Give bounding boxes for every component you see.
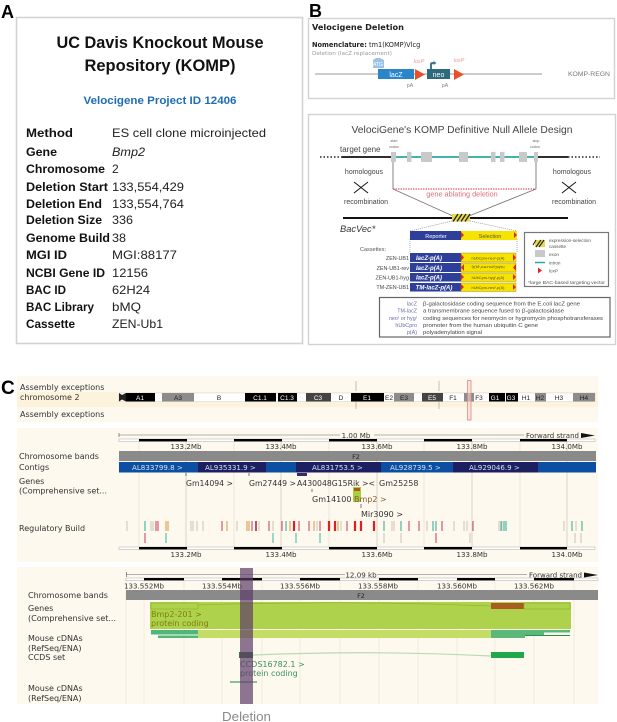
cassette rows: TM-lacZ-p(A)	[416, 286, 452, 292]
Bmp2 gene track: protein coding	[151, 619, 209, 628]
metadata table: 133,554,764	[112, 197, 184, 211]
deletion highlight	[240, 568, 253, 704]
chromosome 2 ideogram: B	[217, 395, 221, 402]
grid lines	[126, 581, 574, 704]
start and stop codon labels: codon	[389, 145, 399, 149]
legend box: loxP	[549, 268, 559, 274]
start and stop codon labels: codon	[530, 145, 540, 149]
genes track: A430048G15Rik ><	[297, 479, 375, 488]
top scale: 1.00 Mb	[342, 431, 371, 440]
left homologous recombination: homologous	[345, 169, 384, 176]
neo box	[427, 69, 450, 79]
chromosome 2 ideogram: H4	[580, 395, 589, 402]
genes track: Gm14094 >	[186, 479, 233, 488]
cassette rows: ZEN-UB1-hyg	[375, 276, 409, 282]
bottom scale	[119, 547, 595, 559]
metadata table: ZEN-Ub1	[112, 317, 163, 331]
nomenclature: Nomenclature: tm1(KOMP)Vlcg	[312, 41, 420, 49]
genes track	[186, 473, 418, 519]
metadata table: Deletion Size	[26, 213, 102, 227]
metadata table: 2	[112, 162, 119, 176]
chromosome band F2: F2	[352, 453, 360, 461]
dotted expansion lines	[410, 221, 517, 253]
detail row labels: (RefSeq/ENA)	[28, 694, 81, 703]
bottom scale: 134.0Mb	[552, 550, 583, 559]
panel A: KOMP repository record	[16, 18, 302, 344]
loxP triangle	[415, 69, 425, 80]
region row labels	[19, 452, 107, 533]
region row labels: Chromosome bands	[19, 452, 99, 461]
detail row labels: Chromosome bands	[28, 591, 108, 600]
metadata table: BAC ID	[26, 283, 66, 297]
icon: ATG: ATG	[373, 62, 383, 68]
icon: ATG	[373, 58, 384, 68]
metadata table: Deletion End	[26, 197, 102, 211]
chromosome 2 ideogram: F3	[475, 395, 483, 402]
metadata table	[26, 126, 266, 331]
top scale: 133.8Mb	[457, 442, 488, 451]
cassette rows: hUbCpro-hygʳ-p(A)	[472, 275, 505, 280]
detail scale: 12.09 kb	[345, 570, 377, 580]
Bmp2 gene track	[150, 602, 571, 629]
panel C: chromosome overview	[17, 376, 598, 422]
chromosome 2 ideogram: E5	[428, 395, 436, 402]
title	[56, 33, 264, 75]
metadata table: 12156	[112, 266, 148, 280]
cassette rows: hUbCpro-neoʳ-p(A)	[472, 285, 505, 290]
detail row labels: CCDS set	[28, 653, 65, 662]
CCDS track: protein coding	[240, 669, 298, 678]
metadata table: 62H24	[112, 283, 150, 297]
metadata table: Method	[26, 126, 73, 140]
metadata table: MGI ID	[26, 248, 67, 262]
cassette rows: ZEN-UB1-rev	[377, 266, 409, 272]
contigs track: AL929046.9 >	[469, 463, 520, 472]
metadata table: bMQ	[112, 300, 141, 314]
legend box	[524, 232, 608, 286]
detail row labels: (RefSeq/ENA)	[28, 644, 81, 653]
left homologous recombination: recombination	[344, 199, 388, 206]
metadata table: Chromosome	[26, 162, 105, 176]
chromosome band F2	[126, 590, 598, 600]
chromosome 2 ideogram: H1	[522, 395, 531, 402]
detail row labels: Mouse cDNAs	[28, 684, 83, 693]
metadata table: 38	[112, 231, 126, 245]
CCDS track	[239, 652, 524, 678]
contigs track: AL928739.5 >	[390, 463, 441, 472]
region row labels: Genes	[19, 477, 44, 486]
panel label C: C	[1, 378, 15, 399]
metadata table: BAC Library	[26, 300, 94, 314]
contigs track: AL831753.5 >	[312, 463, 363, 472]
region row labels: Contigs	[19, 463, 49, 472]
target gene track	[320, 152, 600, 162]
design title: VelociGene's KOMP Definitive Null Allele Design	[352, 124, 573, 136]
detail scale	[124, 570, 598, 590]
detail scale: 133.562Mb	[514, 582, 554, 590]
panel label A: A	[1, 2, 14, 22]
loxP triangle	[454, 69, 464, 80]
right homologous recombination: homologous	[553, 169, 592, 176]
metadata table: MGI:88177	[112, 248, 177, 262]
right homologous recombination	[552, 169, 596, 206]
bottom scale: 133.8Mb	[457, 550, 488, 559]
chromosome 2 ideogram: A3	[174, 395, 182, 402]
loxP labels	[414, 58, 465, 65]
glossary box: polyadenylation signal	[423, 330, 482, 336]
cassette rows: lacZ-p(A)	[416, 276, 442, 282]
metadata table: 336	[112, 213, 133, 227]
detail row labels: Genes	[28, 604, 53, 613]
detail row labels: Mouse cDNAs	[28, 634, 83, 643]
metadata table: Deletion Start	[26, 180, 108, 194]
region row labels: Regulatory Build	[19, 524, 85, 533]
chromosome 2 ideogram	[119, 393, 595, 402]
cassette rows: ZEN-UB1	[386, 256, 409, 262]
detail scale: 133.556Mb	[280, 582, 320, 590]
CCDS track: CCDS16782.1 >	[240, 660, 305, 669]
neo box: neo	[433, 72, 444, 79]
panel C: gene detail view	[17, 567, 598, 704]
glossary box: lacZ	[407, 302, 418, 308]
title: UC Davis Knockout Mouse	[56, 33, 264, 52]
panel label B: B	[309, 1, 322, 21]
glossary box: p(A)	[407, 330, 417, 336]
glossary box: TM-lacZ	[397, 308, 418, 314]
chromosome 2 ideogram: E3	[400, 395, 408, 402]
panel B top: Velocigene deletion	[308, 18, 614, 98]
cassette rows: hUbCpro-neoʳ-p(A)	[472, 256, 505, 260]
cassette schematic: reporter and selection	[410, 231, 517, 240]
glossary box: hUbCpro	[395, 323, 417, 329]
selected region marker	[468, 380, 471, 420]
mouse cDNA track	[151, 630, 570, 638]
Bmp2 gene track: Bmp2-201 >	[151, 610, 202, 619]
assembly exception ticks	[356, 381, 439, 409]
genes track: Gm25258	[379, 479, 418, 488]
glossary box: neoʳ or hygʳ	[389, 316, 418, 322]
start and stop codon labels: start	[390, 139, 398, 143]
legend box: expression-selection	[549, 238, 591, 243]
legend box: *large BAC-based targeting vector	[528, 280, 606, 285]
cassette rows: hUbCpro-neoʳ-p(A)	[471, 265, 504, 270]
chromosome 2 ideogram: E2	[385, 395, 393, 402]
legend box: intron	[549, 260, 561, 266]
glossary box	[380, 298, 610, 337]
top scale: Forward strand	[526, 431, 579, 440]
start and stop codon labels: stop	[533, 139, 539, 143]
top scale	[119, 431, 595, 451]
cassettes heading: Cassettes:	[360, 247, 386, 253]
gene ablating deletion label: gene ablating deletion	[426, 190, 498, 198]
chromosome 2 ideogram: C3	[314, 395, 323, 402]
loxP labels: loxP	[414, 59, 425, 65]
panel C: region overview	[17, 428, 598, 562]
top scale: 133.6Mb	[362, 442, 393, 451]
region row labels: (Comprehensive set...	[19, 486, 107, 496]
metadata table: Bmp2	[112, 145, 145, 159]
cassette rows: lacZ-p(A)	[416, 266, 442, 272]
chromosome 2 ideogram: D	[339, 395, 344, 402]
top scale: 133.2Mb	[171, 442, 202, 451]
genes track: Gm14100	[312, 495, 351, 504]
detail row labels	[28, 591, 116, 703]
deletion subtitle: Deletion (lacZ replacement)	[312, 51, 392, 57]
chromosome band F2	[119, 451, 596, 461]
chromosome 2 ideogram: H2	[536, 395, 545, 402]
glossary box: coding sequences for neomycin or hygromycin phosphotransferases	[423, 316, 603, 322]
chromosome 2 ideogram: G1	[491, 395, 500, 402]
deletion lines	[393, 162, 536, 216]
chromosome 2 ideogram: G3	[507, 395, 516, 402]
genes track: Mir3090 >	[361, 510, 403, 519]
bottom scale: 133.4Mb	[266, 550, 297, 559]
chromosome 2 ideogram: H3	[555, 395, 564, 402]
pA labels: pA	[407, 83, 414, 89]
title: Repository (KOMP)	[84, 56, 236, 75]
genes track: Bmp2 >	[354, 495, 387, 504]
detail scale: 133.560Mb	[437, 582, 477, 590]
genes track: Gm27449 >	[249, 479, 296, 488]
detail scale: 133.552Mb	[124, 582, 164, 590]
metadata table: Gene	[26, 145, 57, 159]
overview row labels: chromosome 2	[20, 393, 80, 402]
chromosome 2 ideogram: E1	[363, 395, 371, 402]
cassette rows: lacZ-p(A)	[416, 256, 442, 262]
target gene label: target gene	[340, 145, 381, 154]
allele line	[315, 73, 542, 75]
chromosome 2 ideogram: F1	[449, 395, 457, 402]
bottom scale: 133.6Mb	[362, 550, 393, 559]
chromosome 2 ideogram: C1.1	[253, 395, 267, 402]
panel B bottom: KOMP definitive null allele design	[308, 114, 616, 344]
metadata table: ES cell clone microinjected	[112, 126, 266, 140]
bottom scale: 133.2Mb	[171, 550, 202, 559]
detail row labels: (Comprehensive set...	[28, 614, 116, 623]
overview row labels: Assembly exceptions	[20, 383, 104, 392]
contigs track: AL935331.9 >	[205, 463, 256, 472]
metadata table: 133,554,429	[112, 180, 184, 194]
metadata table: Cassette	[26, 317, 75, 331]
BacVec label: BacVec*	[340, 224, 376, 234]
detail scale: 133.558Mb	[358, 582, 398, 590]
glossary box: promoter from the human ubiquitin C gene	[423, 323, 538, 329]
chromosome band F2: F2	[357, 592, 365, 600]
KOMP-REGN label: KOMP-REGN	[568, 71, 610, 78]
detail scale: 133.554Mb	[202, 582, 242, 590]
top scale: 134.0Mb	[552, 442, 583, 451]
icon: expression-selection cassette	[452, 214, 470, 222]
overview row labels: Assembly exceptions	[20, 410, 104, 419]
detail scale: Forward strand	[529, 570, 582, 580]
BacVec line	[343, 217, 568, 219]
legend box: exon	[549, 252, 559, 257]
mouse cDNA alignment	[230, 681, 257, 683]
start and stop codon labels	[389, 139, 540, 149]
cassette rows: TM-ZEN-UB1	[376, 285, 409, 291]
grid lines	[139, 441, 520, 547]
lacZ box: lacZ	[389, 72, 403, 79]
contigs track: AL833799.8 >	[132, 463, 183, 472]
top scale: 133.4Mb	[266, 442, 297, 451]
right homologous recombination: recombination	[552, 199, 596, 206]
chromosome 2 ideogram: A1	[136, 395, 144, 402]
contigs track	[119, 462, 596, 472]
left homologous recombination	[344, 169, 388, 206]
glossary box: β-galactosidase coding sequence from the E.coli lacZ gene	[423, 302, 580, 308]
metadata table: NCBI Gene ID	[26, 266, 105, 280]
cassette schematic: reporter and selection: Reporter	[425, 234, 447, 240]
icon: promoter arrow	[430, 60, 436, 69]
cassette rows	[375, 253, 516, 292]
glossary box: a transmembrane sequence fused to β-galactosidase	[423, 308, 564, 314]
loxP labels: loxP	[454, 58, 465, 64]
legend box: cassette	[549, 244, 567, 249]
project id: Velocigene Project ID 12406	[84, 95, 236, 107]
pA labels	[407, 83, 449, 89]
metadata table: Genome Build	[26, 231, 110, 245]
overview row labels	[20, 383, 104, 419]
chromosome 2 ideogram: C1.3	[280, 395, 294, 402]
deletion heading: Velocigene Deletion	[312, 23, 404, 32]
cassette schematic: reporter and selection: Selection	[479, 234, 501, 240]
lacZ box	[378, 69, 414, 79]
pA labels: pA	[442, 83, 449, 89]
regulatory build track	[127, 521, 582, 543]
